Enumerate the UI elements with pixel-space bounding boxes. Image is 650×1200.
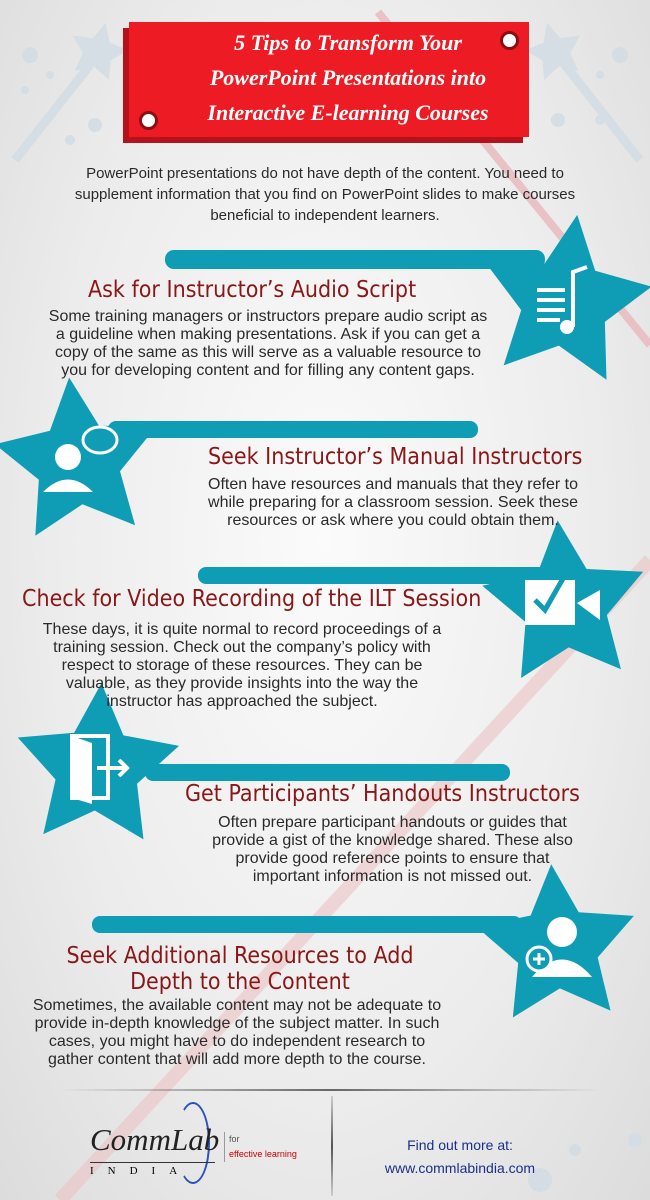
link text: www.commlabindia.com [385, 1160, 535, 1176]
text 3: instructor has approached the subject. [106, 693, 378, 710]
text 3: respect to storage of these resources. They can be [62, 657, 422, 674]
heading 5: Seek Additional Resources to Add Depth to the Content [66, 943, 414, 995]
icon: star 2 person speaking [0, 369, 166, 539]
heading 1: Ask for Instructor’s Audio Script [88, 277, 416, 303]
link text [384, 1137, 535, 1176]
text 3: training session. Check out the company’s policy with [53, 639, 431, 656]
footer [76, 1089, 584, 1196]
logo: INDIA [90, 1165, 191, 1177]
icon: star 1 script [472, 203, 650, 384]
text 1: Some training managers or instructors prepare audio script as a guideline when making presentations. Ask if you can get a copy of the same as this will serve as a valuable resource to you for developing content and for filling any content gaps. [49, 308, 487, 379]
icon: star 3 video [477, 513, 650, 681]
logo [90, 1102, 297, 1184]
heading 4: Get Participants’ Handouts Instructors [185, 781, 580, 807]
icon: star 5 add person [473, 859, 640, 1020]
text 3 [43, 621, 442, 710]
logo: for [229, 1134, 240, 1144]
icon: star 4 door exit [13, 679, 182, 841]
link text: Find out more at: [407, 1137, 513, 1153]
text 3: These days, it is quite normal to record proceedings of a [43, 621, 441, 638]
text 5: Sometimes, the available content may not be adequate to provide in-depth knowledge of the subject matter. In such cases, you might have to do independent research to gather content that will add more depth to the course. [33, 997, 441, 1068]
title text: Interactive E-learning Courses [207, 100, 489, 125]
text 2: Often have resources and manuals that they refer to while preparing for a classroom session. Seek these resources or ask where you could obtain them. [208, 476, 578, 529]
title text: 5 Tips to Transform Your [234, 30, 462, 55]
text 3: valuable, as they provide insights into the way the [66, 675, 418, 692]
heading 3: Check for Video Recording of the ILT Session [22, 586, 481, 612]
logo: CommLab [90, 1122, 219, 1157]
title text [207, 30, 489, 125]
title banner [123, 22, 529, 143]
title text: PowerPoint Presentations into [210, 65, 486, 90]
logo: effective learning [229, 1149, 297, 1159]
heading 2: Seek Instructor’s Manual Instructors [208, 444, 582, 470]
text 4: Often prepare participant handouts or guides that provide a gist of the knowledge shared. These also provide good reference points to ensure that important information is not missed out. [212, 814, 573, 885]
intro text: PowerPoint presentations do not have depth of the content. You need to supplement information that you find on PowerPoint slides to make courses beneficial to independent learners. [75, 165, 575, 224]
